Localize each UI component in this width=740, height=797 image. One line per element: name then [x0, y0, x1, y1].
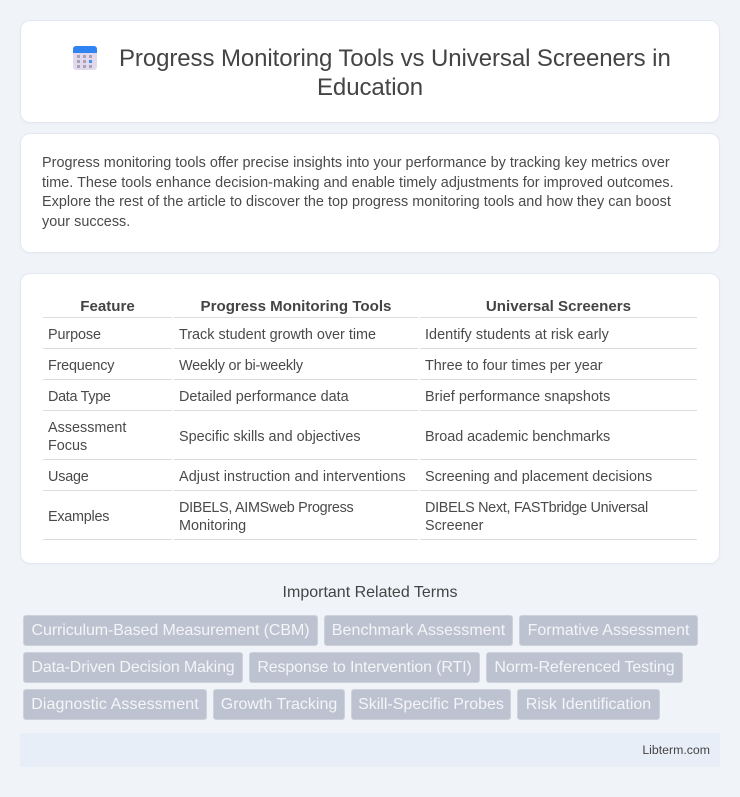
heading: related terms: Important Related Terms: [283, 584, 457, 601]
title: Education: [317, 74, 423, 101]
table rows: Adjust instruction and interventions: [179, 469, 406, 485]
table rows: Monitoring: [179, 518, 246, 534]
panel: related term tags: Benchmark Assessment: [332, 622, 505, 639]
table rows: Broad academic benchmarks: [425, 429, 610, 445]
table header: Progress Monitoring Tools: [201, 298, 391, 315]
table rows: DIBELS Next, FASTbridge Universal: [425, 500, 648, 516]
footer: [20, 733, 720, 767]
panel: introduction text: time. These tools enhance decision-making and enable timely adjustments for improved outcomes.: [42, 174, 674, 190]
panel: comparison table: [20, 273, 720, 564]
panel: introduction text: your success.: [42, 214, 130, 230]
panel: introduction text: Explore the rest of the article to discover the top progress monitoring tools and how they can boost: [42, 194, 671, 210]
table rows: Identify students at risk early: [425, 327, 609, 343]
panel: related term tags: Risk Identification: [526, 696, 651, 713]
panel: introduction text: [20, 133, 720, 253]
panel: related term tags: Norm-Referenced Testing: [494, 659, 675, 676]
table rows: Screener: [425, 518, 483, 534]
panel: related term tags: Diagnostic Assessment: [31, 696, 199, 713]
panel: title header: [20, 20, 720, 123]
table rows: Screening and placement decisions: [425, 469, 652, 485]
table rows: Three to four times per year: [425, 358, 603, 374]
table rows: DIBELS, AIMSweb Progress: [179, 500, 353, 516]
panel: related term tags: Skill-Specific Probes: [358, 696, 504, 713]
panel: related term tags: [23, 615, 698, 720]
panel: related term tags: Formative Assessment: [528, 622, 689, 639]
table rows: Focus: [48, 438, 87, 454]
table rows: Data Type: [48, 389, 111, 405]
footer: Libterm.com: [642, 743, 710, 757]
table rows: Track student growth over time: [179, 327, 376, 343]
panel: related term tags: Response to Intervention (RTI): [257, 659, 472, 676]
panel: related term tags: Curriculum-Based Measurement (CBM): [32, 622, 309, 639]
title: [119, 45, 671, 101]
panel: introduction text: Progress monitoring tools offer precise insights into your performance by tracking key metrics over: [42, 155, 670, 171]
panel: related term tags: Growth Tracking: [221, 696, 337, 713]
table rows: Weekly or bi-weekly: [179, 358, 303, 374]
table header: [80, 298, 631, 315]
table rows: [43, 317, 697, 540]
table header: Universal Screeners: [486, 298, 631, 315]
table rows: Purpose: [48, 327, 101, 343]
table header: Feature: [80, 298, 135, 315]
table rows: Specific skills and objectives: [179, 429, 361, 445]
icon: calendar: [73, 46, 97, 70]
panel: related term tags: Data-Driven Decision Making: [31, 659, 235, 676]
table rows: Usage: [48, 469, 89, 485]
table rows: Detailed performance data: [179, 389, 349, 405]
table rows: Brief performance snapshots: [425, 389, 610, 405]
table rows: Assessment: [48, 420, 126, 436]
table rows: Frequency: [48, 358, 114, 374]
table rows: Examples: [48, 509, 109, 525]
title: Progress Monitoring Tools vs Universal Screeners in: [119, 45, 671, 72]
